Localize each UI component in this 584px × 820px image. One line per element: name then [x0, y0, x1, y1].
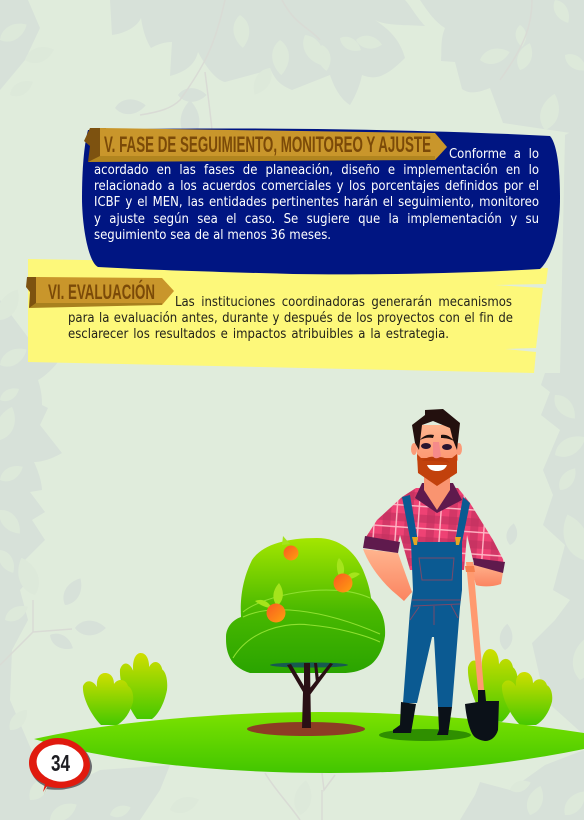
- moustache: [422, 457, 450, 463]
- text: esclarecer los resultados e impactos atribuibles a la estrategia.: [68, 327, 449, 342]
- shadow: [379, 729, 471, 741]
- neck: [424, 476, 450, 510]
- boot right: [437, 707, 452, 735]
- text: relacionado a los acuerdos comerciales y los porcentajes definidos por el: [94, 179, 539, 194]
- crown: [226, 538, 385, 673]
- banner: heading V: [84, 128, 447, 162]
- bushes right: [468, 649, 552, 725]
- text: ICBF y el MEN, las entidades pertinentes harán el seguimiento, monitoreo: [94, 195, 539, 210]
- page number: 34: [51, 750, 70, 776]
- farmer: [363, 409, 505, 741]
- arm left: [363, 549, 412, 601]
- cuff left: [363, 536, 400, 553]
- arm right: [470, 563, 503, 586]
- heading VI text: VI. EVALUACIÓN: [48, 280, 155, 304]
- smile: [427, 465, 447, 471]
- eyes: [421, 443, 452, 450]
- text block: monitoring phase: [94, 147, 539, 243]
- text: Conforme a lo: [449, 147, 539, 162]
- overalls: [402, 495, 470, 707]
- yellow panel: evaluation: [28, 259, 548, 373]
- boot left: [393, 702, 416, 733]
- soil: [247, 722, 365, 736]
- collar: [415, 483, 462, 513]
- shirt: [366, 488, 505, 570]
- text: y ajuste según sea el caso. Se sugiere que la implementación y su: [94, 212, 539, 227]
- tree: [226, 536, 385, 736]
- buckles: [412, 537, 461, 545]
- crown shadow: [270, 662, 348, 668]
- ears: [411, 443, 462, 455]
- text: acordado en las fases de planeación, diseño e implementación en lo: [94, 163, 539, 178]
- text: seguimiento sea de al menos 36 meses.: [94, 228, 331, 243]
- page badge: [29, 738, 92, 795]
- nose: [433, 442, 441, 458]
- cuff right: [473, 558, 505, 573]
- text: Las instituciones coordinadoras generarán mecanismos: [175, 295, 512, 310]
- orange right: [334, 558, 360, 592]
- orange top: [282, 536, 298, 560]
- pocket and seams: [410, 558, 461, 625]
- banner: heading VI: [26, 277, 174, 308]
- ground: [34, 712, 584, 773]
- beard: [417, 454, 457, 486]
- hair: [412, 409, 460, 450]
- orange left: [255, 583, 286, 622]
- text block: evaluation: [68, 295, 513, 342]
- shovel: [465, 562, 499, 741]
- trunk: [287, 663, 333, 728]
- eyebrows: [420, 435, 454, 441]
- head: [417, 425, 458, 486]
- navy panel: monitoring phase: [82, 128, 560, 274]
- bushes left: [83, 653, 167, 725]
- text: para la evaluación antes, durante y después de los proyectos con el fin de: [68, 311, 513, 326]
